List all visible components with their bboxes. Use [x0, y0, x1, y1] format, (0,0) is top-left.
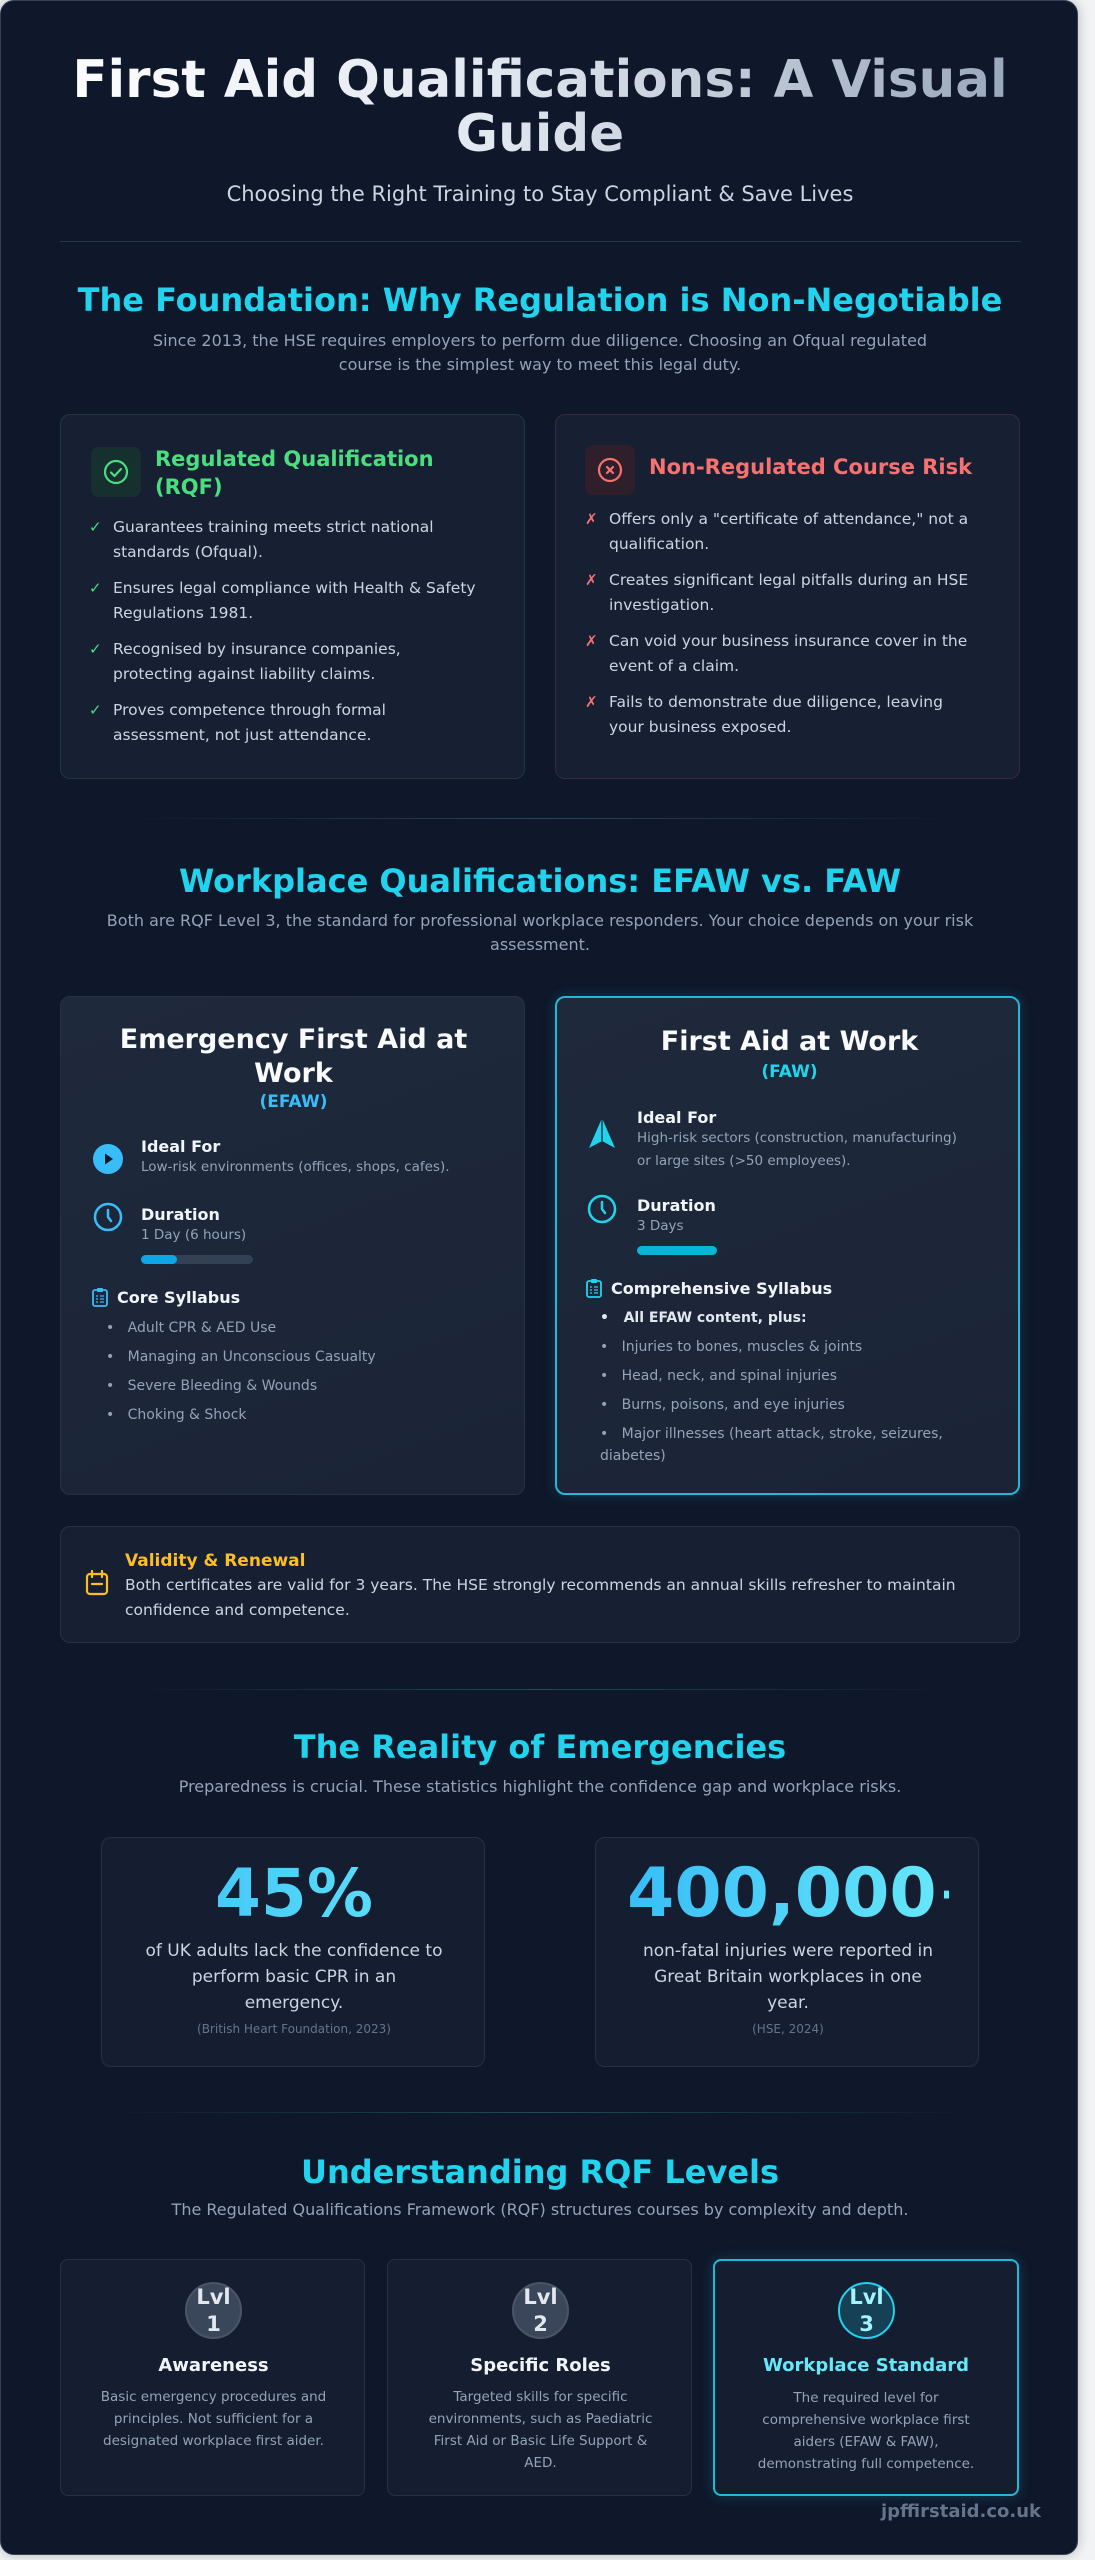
level 3 description: comprehensive workplace first: [762, 2412, 970, 2428]
intro paragraph: RQF: The Regulated Qualifications Framework (RQF) structures courses by complexity and depth.: [172, 2200, 908, 2219]
duration text FAW: Duration: [637, 1196, 716, 1215]
panel: regulated qualification: ✓: [89, 518, 102, 536]
ideal for text: Low-risk environments (offices, shops, cafes).: [141, 1159, 450, 1175]
badge: level 2: Lvl: [523, 2285, 558, 2309]
list: benefits: Proves competence through formal: [113, 701, 386, 719]
stat source: (HSE, 2024): [752, 2022, 824, 2036]
level 2 description: environments, such as Paediatric: [429, 2411, 652, 2427]
validity text: Validity & Renewal: [125, 1551, 305, 1571]
stat description: [146, 1941, 442, 2013]
level card 3: [713, 2259, 1019, 2496]
icon: arrow: [589, 1118, 615, 1148]
list: risks: investigation.: [609, 596, 714, 614]
list: core syllabus: [106, 1320, 376, 1423]
level 1 description: Basic emergency procedures and: [101, 2389, 326, 2405]
list: core syllabus: • Managing an Unconscious Casualty: [106, 1349, 376, 1365]
heading: foundation: The Foundation: Why Regulation is Non-Negotiable: [78, 281, 1002, 319]
level 2 description: [429, 2389, 652, 2471]
subtitle: Choosing the Right Training to Stay Compliant & Save Lives: [227, 182, 853, 206]
stat description: perform basic CPR in an: [192, 1967, 396, 1987]
list: risks: Fails to demonstrate due diligence, leaving: [609, 693, 943, 711]
badge: level 3: [838, 2282, 895, 2339]
icon: clock FAW: [588, 1194, 616, 1224]
level 3 description: aiders (EFAW & FAW),: [794, 2434, 938, 2450]
list: risks: [585, 510, 968, 736]
panel: regulated qualification: [60, 414, 525, 779]
validity text: Both certificates are valid for 3 years. The HSE strongly recommends an annual skills refresher to maintain confidence and competence.: [125, 1576, 956, 1619]
intro paragraph: foundation: Since 2013, the HSE requires employers to perform due diligence. Choosing an Ofqual regulated course is the simplest way to meet this legal duty.: [153, 331, 927, 374]
list: benefits: standards (Ofqual).: [113, 543, 263, 561]
list: core syllabus: • Adult CPR & AED Use: [106, 1320, 276, 1336]
icon: play circle: [93, 1144, 123, 1174]
icon: check circle: [91, 447, 141, 497]
list: benefits: protecting against liability claims.: [113, 665, 375, 683]
level 3 description: The required level for: [793, 2390, 939, 2406]
list: core syllabus: • Choking & Shock: [106, 1407, 247, 1423]
panel: FAW: [555, 996, 1020, 1495]
heading: non-regulated: Non-Regulated Course Risk: [649, 455, 972, 479]
panel: non-regulated risk: ✗: [585, 632, 598, 650]
stat description: year.: [767, 1993, 809, 2013]
stat source: (British Heart Foundation, 2023): [197, 2022, 391, 2036]
badge: level 1: Lvl: [196, 2285, 231, 2309]
badge: level 1: [185, 2282, 242, 2339]
validity text: [125, 1551, 956, 1619]
syllabus heading: Core Syllabus: [117, 1288, 240, 1307]
list: benefits: assessment, not just attendance.: [113, 726, 371, 744]
ideal for text FAW: [637, 1108, 957, 1169]
panel: non-regulated risk: ✗: [585, 571, 598, 589]
panel: non-regulated risk: [555, 414, 1020, 779]
heading: workplace qualifications: Workplace Qualifications: EFAW vs. FAW: [179, 862, 901, 900]
duration text: [141, 1205, 246, 1243]
list: comprehensive syllabus: • All EFAW content, plus:: [600, 1310, 807, 1326]
list: risks: Can void your business insurance cover in the: [609, 632, 967, 650]
list: comprehensive syllabus: • Burns, poisons, and eye injuries: [600, 1397, 845, 1413]
list: comprehensive syllabus: [600, 1310, 943, 1464]
icon: calendar: [86, 1570, 108, 1596]
callout: validity & renewal: [60, 1526, 1020, 1643]
EFAW title: Emergency First Aid at Work: [120, 1024, 467, 1089]
list: comprehensive syllabus: • Head, neck, and spinal injuries: [600, 1368, 837, 1384]
level 2 description: AED.: [524, 2455, 557, 2471]
stat card: 45%: [101, 1837, 485, 2067]
panel: EFAW: [60, 996, 525, 1495]
duration text FAW: 3 Days: [637, 1218, 684, 1234]
list: benefits: Recognised by insurance companies,: [113, 640, 401, 658]
ideal for text FAW: High-risk sectors (construction, manufacturing): [637, 1130, 957, 1146]
stat number: 45%: [215, 1855, 373, 1932]
stat description: of UK adults lack the confidence to: [146, 1941, 442, 1961]
footer brand: jpffirstaid.co.uk: [881, 2501, 1041, 2522]
EFAW subtitle: (EFAW): [260, 1092, 327, 1112]
list: risks: qualification.: [609, 535, 709, 553]
badge: level 2: [512, 2282, 569, 2339]
icon: x circle: [585, 445, 635, 495]
list: benefits: Guarantees training meets strict national: [113, 518, 434, 536]
bar: duration 3 days: [637, 1246, 717, 1255]
FAW subtitle: (FAW): [761, 1062, 818, 1082]
stat description: non-fatal injuries were reported in: [643, 1941, 933, 1961]
stat description: emergency.: [245, 1993, 343, 2013]
stat description: [643, 1941, 933, 2013]
ideal for text: [141, 1137, 450, 1175]
level card 1: [60, 2259, 365, 2496]
bar: duration 1 day: [141, 1255, 253, 1264]
panel: regulated qualification: ✓: [89, 579, 102, 597]
badge: level 2: 2: [533, 2312, 548, 2336]
panel: regulated qualification: ✓: [89, 640, 102, 658]
heading: RQF: Regulated Qualification (RQF): [155, 447, 434, 499]
panel: non-regulated risk: ✗: [585, 693, 598, 711]
panel: non-regulated risk: ✗: [585, 510, 598, 528]
level 2 description: Targeted skills for specific: [453, 2389, 628, 2405]
level 1 title: Awareness: [158, 2355, 269, 2376]
comprehensive syllabus heading: Comprehensive Syllabus: [611, 1279, 832, 1298]
level card 2: [387, 2259, 692, 2496]
list: core syllabus: • Severe Bleeding & Wounds: [106, 1378, 317, 1394]
list: risks: event of a claim.: [609, 657, 739, 675]
badge: level 1: 1: [206, 2312, 221, 2336]
intro paragraph: reality: Preparedness is crucial. These statistics highlight the confidence gap and workplace risks.: [179, 1777, 901, 1796]
duration text: Duration: [141, 1205, 220, 1224]
ideal for text FAW: or large sites (>50 employees).: [637, 1153, 851, 1169]
intro paragraph: workplace: Both are RQF Level 3, the standard for professional workplace responders. Your choice depends on your risk assessment.: [107, 911, 973, 954]
list: risks: Creates significant legal pitfalls during an HSE: [609, 571, 968, 589]
list: comprehensive syllabus: • Injuries to bones, muscles & joints: [600, 1339, 862, 1355]
heading: RQF levels: Understanding RQF Levels: [301, 2153, 779, 2191]
list: benefits: Regulations 1981.: [113, 604, 253, 622]
ideal for text FAW: Ideal For: [637, 1108, 716, 1127]
level 1 description: designated workplace first aider.: [103, 2433, 324, 2449]
title: First Aid Qualifications: A Visual Guide: [72, 50, 1008, 164]
list: risks: your business exposed.: [609, 718, 791, 736]
panel: regulated qualification: ✓: [89, 701, 102, 719]
duration text FAW: [637, 1196, 716, 1234]
list: benefits: Ensures legal compliance with Health & Safety: [113, 579, 476, 597]
level 2 description: First Aid or Basic Life Support &: [434, 2433, 647, 2449]
level 1 description: [101, 2389, 326, 2449]
level 1 description: principles. Not sufficient for a: [114, 2411, 313, 2427]
list: benefits: [89, 518, 476, 744]
list: comprehensive syllabus: • Major illnesses (heart attack, stroke, seizures, diabetes): [600, 1426, 943, 1464]
level 3 title: Workplace Standard: [763, 2355, 969, 2376]
ideal for text: Ideal For: [141, 1137, 220, 1156]
level 3 description: [758, 2390, 974, 2472]
level 2 title: Specific Roles: [470, 2355, 611, 2376]
FAW title: First Aid at Work: [661, 1026, 918, 1057]
list: risks: Offers only a "certificate of attendance," not a: [609, 510, 968, 528]
icon: clock: [94, 1202, 122, 1232]
stat description: Great Britain workplaces in one: [654, 1967, 922, 1987]
badge: level 3: 3: [859, 2312, 874, 2336]
duration text: 1 Day (6 hours): [141, 1227, 246, 1243]
stat card: 400,000+: [595, 1837, 979, 2067]
badge: level 3: Lvl: [849, 2285, 884, 2309]
level 3 description: demonstrating full competence.: [758, 2456, 974, 2472]
stat number: [102, 1855, 486, 1932]
heading: reality: The Reality of Emergencies: [294, 1728, 786, 1766]
